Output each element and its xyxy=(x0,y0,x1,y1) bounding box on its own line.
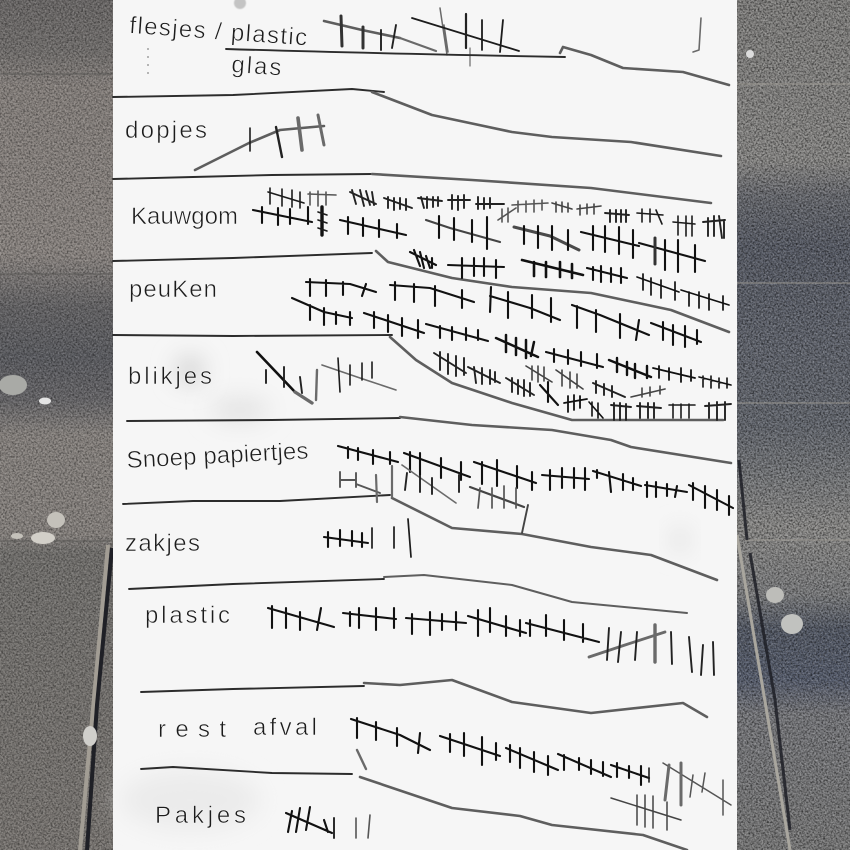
label: snoep papiertjes: Snoep papiertjes xyxy=(126,438,309,474)
tally marks: zakjes xyxy=(324,519,411,557)
row: snoep papiertjes xyxy=(126,438,733,533)
tally marks: kauwgom xyxy=(253,188,729,310)
row: blikjes xyxy=(128,352,731,420)
tally marks: dopjes xyxy=(195,115,324,170)
pavement background, left side xyxy=(0,0,113,850)
row: flesjes / plastic / glas xyxy=(129,8,701,81)
tally marks: blikjes xyxy=(257,352,731,420)
row: kauwgom xyxy=(131,188,729,310)
pavement background, right side xyxy=(737,0,850,850)
tally marks: snoep papiertjes xyxy=(338,446,733,533)
label: flesjes / plastic: flesjes / plastic xyxy=(129,12,308,51)
row: zakjes xyxy=(125,519,411,557)
label: dopjes: dopjes xyxy=(125,117,207,144)
label: pakjes: Pakjes xyxy=(155,802,246,829)
tally marks: pakjes xyxy=(286,807,370,838)
label: afval: afval xyxy=(253,714,317,741)
tally marks: rest afval xyxy=(351,718,731,830)
row: dopjes xyxy=(125,115,324,170)
tally marks: flesjes xyxy=(324,8,701,66)
label: zakjes: zakjes xyxy=(125,530,200,557)
row: plastic xyxy=(145,602,714,675)
row: pakjes xyxy=(155,802,370,838)
label: glas: glas xyxy=(231,51,282,81)
row: peuken xyxy=(129,276,731,388)
label: kauwgom: Kauwgom xyxy=(131,203,238,230)
row: rest afval xyxy=(158,714,731,830)
row divider lines, top sheet xyxy=(113,47,731,850)
tally marks: peuken xyxy=(292,279,731,388)
label: peuken: peuKen xyxy=(129,276,217,303)
label: plastic: plastic xyxy=(145,602,230,629)
label: blikjes: blikjes xyxy=(128,363,212,390)
paper sheet xyxy=(113,0,737,850)
tally marks: plastic xyxy=(268,606,714,675)
label: rest: rest xyxy=(158,716,226,743)
